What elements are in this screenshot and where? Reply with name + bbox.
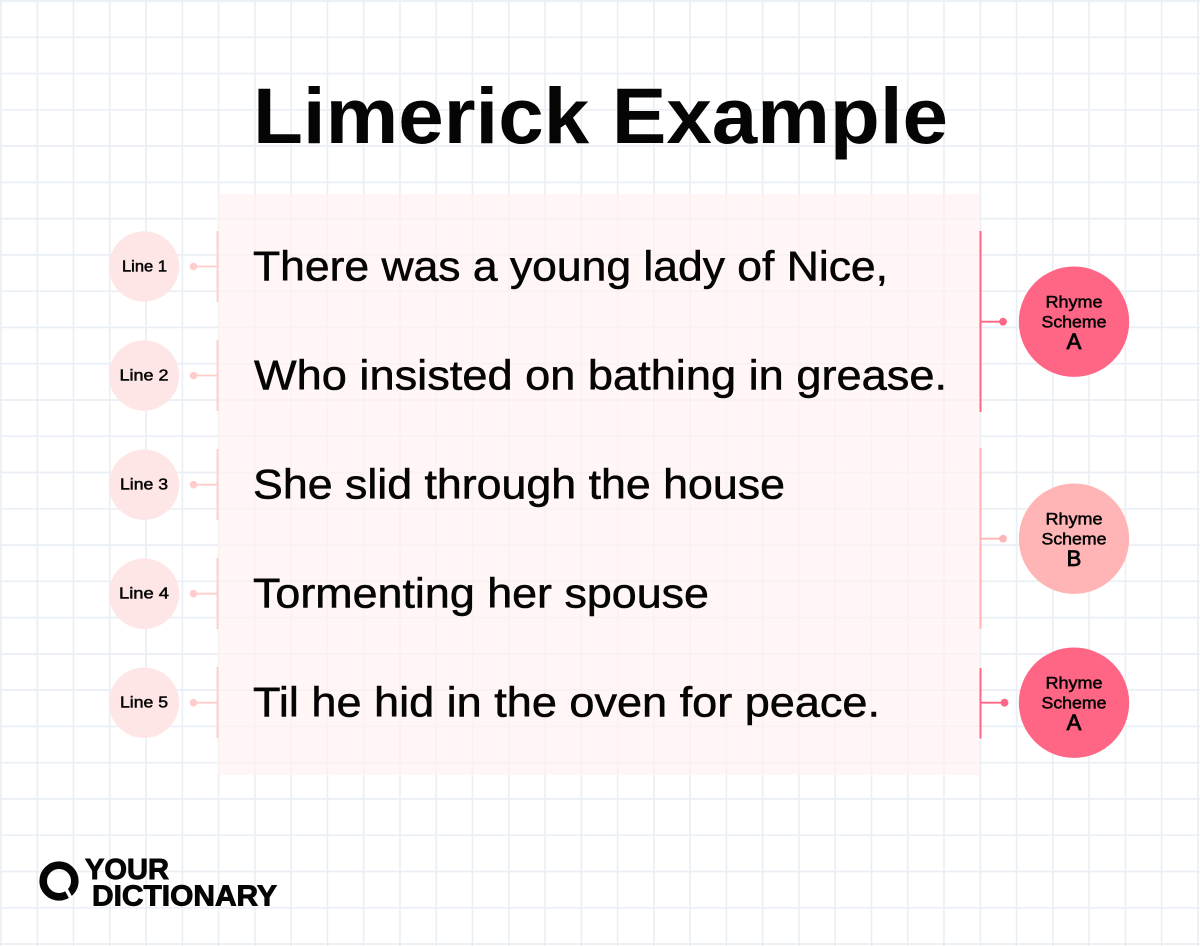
rhyme scheme A: line 5: A	[1067, 710, 1082, 735]
line marker 5	[109, 667, 218, 738]
rhyme scheme A: line 5	[980, 648, 1129, 758]
icon: Q ring	[43, 865, 75, 900]
rhyme scheme B: lines 3 and 4: B	[1067, 546, 1081, 571]
line marker 1: Line 1	[122, 258, 167, 276]
text: line 5: Til he hid in the oven for peace.	[253, 678, 880, 726]
panel: poem lines	[253, 242, 947, 726]
rhyme scheme A: lines 1 and 2: A	[1067, 329, 1082, 354]
line marker 3: Line 3	[120, 477, 168, 494]
line marker 2: Line 2	[120, 368, 169, 384]
rhyme scheme A: lines 1 and 2: Rhyme	[1046, 294, 1102, 312]
text: line 2: Who insisted on bathing in grease.	[254, 352, 947, 398]
text: logo wordmark	[85, 854, 277, 912]
logo: YourDictionary	[43, 854, 277, 912]
line marker 4	[109, 558, 218, 629]
rhyme scheme A: line 5: Rhyme	[1046, 674, 1102, 692]
rhyme scheme A: lines 1 and 2	[980, 231, 1129, 412]
panel: poem background	[218, 194, 980, 775]
line marker 4: Line 4	[119, 586, 169, 603]
rhyme scheme A: line 5: Scheme	[1042, 694, 1106, 712]
title: Limerick Example	[253, 71, 948, 160]
line marker 5: Line 5	[120, 695, 168, 712]
text: line 1: There was a young lady of Nice,	[253, 242, 888, 290]
rhyme scheme B: lines 3 and 4	[980, 448, 1129, 629]
text: line 3: She slid through the house	[253, 460, 785, 508]
line marker 3	[109, 449, 218, 520]
line marker 1	[109, 231, 218, 302]
rhyme scheme B: lines 3 and 4: Rhyme	[1046, 510, 1102, 528]
line marker 2	[109, 340, 218, 411]
text: line 4: Tormenting her spouse	[253, 570, 709, 616]
text: logo wordmark: DICTIONARY	[92, 880, 277, 912]
text: logo wordmark: YOUR	[85, 854, 169, 886]
rhyme scheme A: lines 1 and 2: Scheme	[1042, 314, 1106, 332]
rhyme scheme B: lines 3 and 4: Scheme	[1042, 530, 1106, 548]
